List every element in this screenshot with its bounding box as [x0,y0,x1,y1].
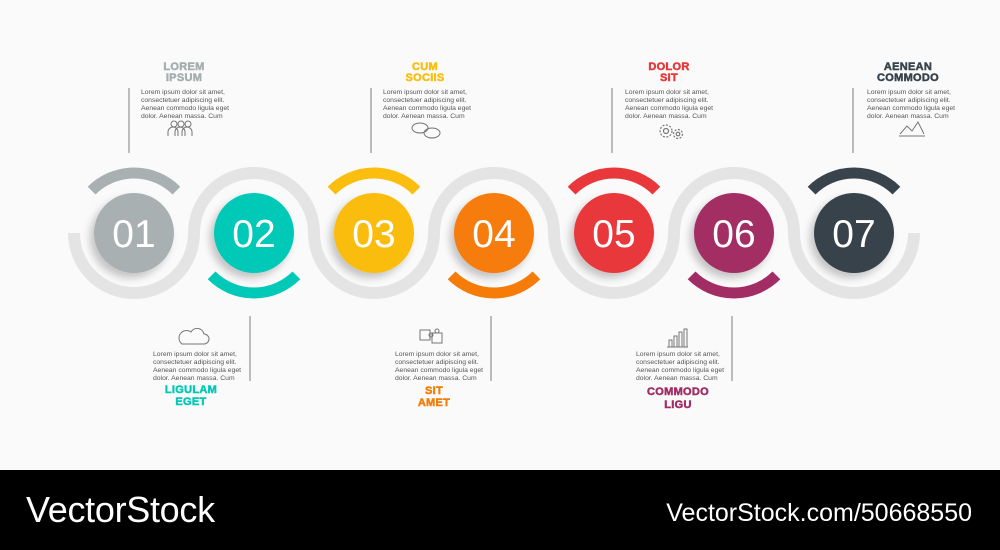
icon: gears [660,125,682,138]
text block 1 [129,61,229,153]
text block 3: consectetuer adipiscing elit. [383,97,467,104]
text block 4: Aenean commodo ligula eget [395,367,483,374]
text block 1: IPSUM [166,72,202,84]
text block 6: LIGU [664,399,692,411]
text block 6: Aenean commodo ligula eget [636,367,724,374]
text block 4: consectetuer adipiscing elit. [395,359,479,366]
text block 4 [395,316,491,409]
text block 5: Aenean commodo ligula eget [625,105,713,112]
text block 2 [153,316,250,408]
text block 7 [853,61,955,153]
text block 3: Aenean commodo ligula eget [383,105,471,112]
text block 5: dolor. Aenean massa. Cum [625,113,707,120]
step 04: 04 [472,213,516,256]
text block 6: consectetuer adipiscing elit. [636,359,720,366]
footer bar: VectorStock.com/50668550 [666,499,972,527]
text block 5: consectetuer adipiscing elit. [625,97,709,104]
step 03: 03 [352,213,396,256]
text block 6: Lorem ipsum dolor sit amet, [636,351,720,358]
text block 2: Lorem ipsum dolor sit amet, [153,351,237,358]
icon: chat [412,123,440,138]
step 05 [572,173,656,273]
text block 2: consectetuer adipiscing elit. [153,359,237,366]
text block 7: dolor. Aenean massa. Cum [867,113,949,120]
text block 7: Aenean commodo ligula eget [867,105,955,112]
text block 2: EGET [175,396,207,408]
step 07 [812,173,896,273]
icon: bar chart [667,329,688,347]
text block 5: DOLOR [648,61,690,73]
step 04 [452,193,536,293]
text block 2: Aenean commodo ligula eget [153,367,241,374]
text block 3: Lorem ipsum dolor sit amet, [383,89,467,96]
text block 2: LIGULAM [165,384,217,396]
text block 3 [371,61,471,153]
text block 3: dolor. Aenean massa. Cum [383,113,465,120]
text block 1: LOREM [163,61,205,73]
step 02 [212,193,296,293]
text block 1: Aenean commodo ligula eget [141,105,229,112]
text block 1: Lorem ipsum dolor sit amet, [141,89,225,96]
step 06 [692,193,776,293]
text block 5: Lorem ipsum dolor sit amet, [625,89,709,96]
text block 4: SIT [425,385,443,397]
text block 3: CUM [412,61,438,73]
text block 7: Lorem ipsum dolor sit amet, [867,89,951,96]
text block 2: dolor. Aenean massa. Cum [153,375,235,382]
icon: people [168,121,192,136]
step 02: 02 [232,213,276,256]
gray wave track [74,173,914,293]
icon: cloud [179,328,209,344]
step 06: 06 [712,213,756,256]
text block 7: consectetuer adipiscing elit. [867,97,951,104]
step 03 [332,173,416,273]
text block 6 [636,316,732,411]
text block 6: COMMODO [647,386,709,398]
text block 4: Lorem ipsum dolor sit amet, [395,351,479,358]
step 01: 01 [112,213,156,256]
step 07: 07 [832,213,876,256]
step 01 [92,173,176,273]
text block 4: AMET [418,397,450,409]
text block 5 [612,61,713,153]
text block 4: dolor. Aenean massa. Cum [395,375,477,382]
text block 1: dolor. Aenean massa. Cum [141,113,223,120]
text block 5: SIT [660,72,678,84]
text block 7: AENEAN [884,61,932,73]
text block 6: dolor. Aenean massa. Cum [636,375,718,382]
icon: chart line [899,122,925,136]
step 05: 05 [592,213,636,256]
icon: puzzle [420,329,442,343]
text block 3: SOCIIS [405,72,445,84]
footer bar: VectorStock [26,489,216,530]
text block 1: consectetuer adipiscing elit. [141,97,225,104]
text block 7: COMMODO [877,72,939,84]
footer bar [0,470,1000,550]
